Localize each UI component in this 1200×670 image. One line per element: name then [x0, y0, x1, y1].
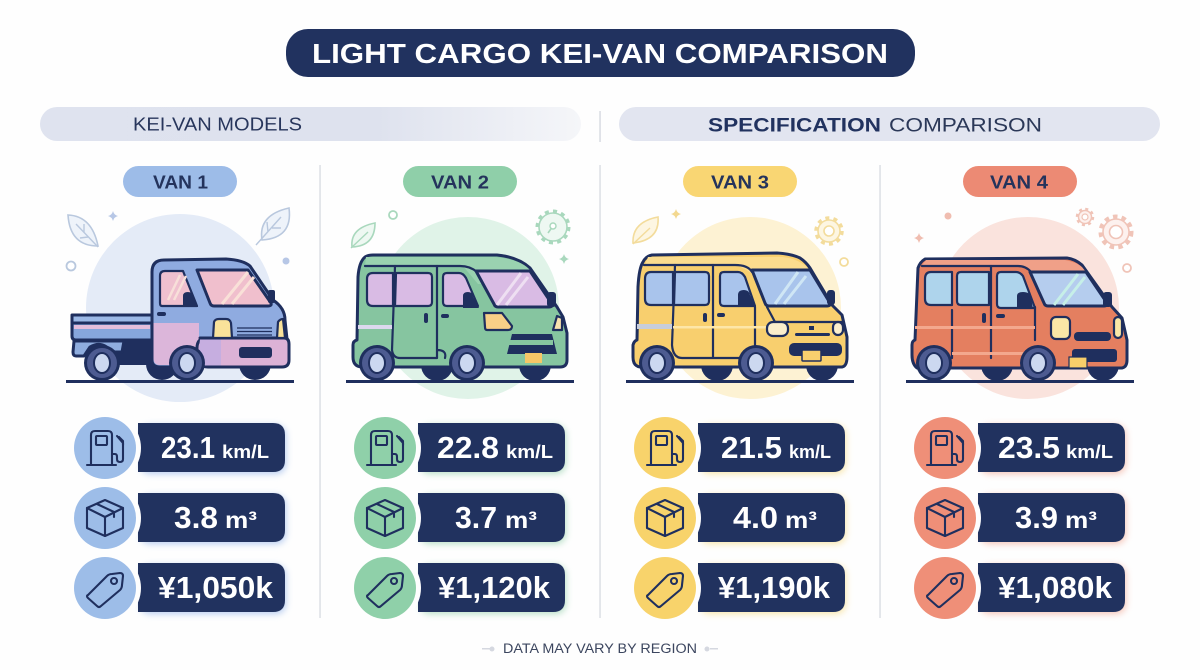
- fuel economy stat: km/L: [222, 442, 269, 462]
- van 4 label: [963, 166, 1077, 197]
- cargo volume stat: [629, 482, 846, 554]
- fuel economy stat: 23.1: [161, 430, 215, 465]
- cargo volume stat: m³: [505, 507, 537, 533]
- cargo volume stat: 3.8: [174, 500, 218, 535]
- section header: specification comparison: SPECIFICATION: [708, 116, 881, 136]
- van 1 label: VAN 1: [153, 172, 208, 192]
- fuel economy stat: 23.5: [998, 430, 1060, 465]
- section header: kei-van models: [40, 107, 581, 141]
- cargo volume stat: [909, 482, 1126, 554]
- price stat: ¥1,190k: [718, 570, 831, 605]
- panel: van 1: [66, 166, 294, 624]
- fuel economy stat: km/L: [1066, 442, 1113, 462]
- van 4 backdrop and decorations: [906, 209, 1134, 399]
- van 1 stats: [69, 412, 286, 624]
- panel: van 3: [626, 166, 854, 624]
- van 1 label: [123, 166, 237, 197]
- van 2 label: VAN 2: [431, 172, 489, 192]
- fuel economy stat: [629, 412, 846, 484]
- title: [286, 29, 915, 77]
- section header: specification comparison: COMPARISON: [889, 116, 1042, 136]
- fuel economy stat: 22.8: [437, 430, 499, 465]
- van 3 stats: [629, 412, 846, 624]
- price stat: [629, 552, 846, 624]
- fuel economy stat: km/L: [506, 442, 553, 462]
- cargo volume stat: m³: [785, 507, 817, 533]
- van 3 label: VAN 3: [711, 172, 769, 192]
- van 2 illustration: [353, 255, 567, 381]
- van 2 stats: [349, 412, 566, 624]
- footer note: DATA MAY VARY BY REGION: [503, 641, 697, 656]
- fuel economy stat: [349, 412, 566, 484]
- cargo volume stat: 4.0: [733, 500, 778, 535]
- cargo volume stat: m³: [225, 507, 257, 533]
- price stat: ¥1,080k: [998, 570, 1113, 605]
- section header: kei-van models: KEI-VAN MODELS: [133, 114, 302, 134]
- price stat: [69, 552, 286, 624]
- price stat: [909, 552, 1126, 624]
- cargo volume stat: [349, 482, 566, 554]
- price stat: ¥1,050k: [158, 570, 274, 605]
- van 1 backdrop and decorations: [66, 208, 294, 402]
- van 2 label: [403, 166, 517, 197]
- van 3 label: [683, 166, 797, 197]
- fuel economy stat: 21.5: [721, 430, 782, 465]
- title: LIGHT CARGO KEI-VAN COMPARISON: [312, 38, 888, 69]
- van 4 label: VAN 4: [990, 172, 1048, 192]
- cargo volume stat: 3.7: [455, 500, 497, 535]
- price stat: [349, 552, 566, 624]
- price stat: ¥1,120k: [438, 570, 551, 605]
- fuel economy stat: km/L: [789, 442, 831, 462]
- cargo volume stat: [69, 482, 286, 554]
- fuel economy stat: [909, 412, 1126, 484]
- van 3 illustration: [633, 253, 847, 381]
- section header: specification comparison: [619, 107, 1160, 141]
- cargo volume stat: m³: [1065, 507, 1097, 533]
- panel: van 4: [906, 166, 1134, 624]
- fuel economy stat: [69, 412, 286, 484]
- cargo volume stat: 3.9: [1015, 500, 1058, 535]
- van 3 backdrop and decorations: [626, 209, 854, 399]
- van 4 stats: [909, 412, 1126, 624]
- van 1 illustration: kei truck: [72, 259, 289, 381]
- van 4 illustration: [912, 258, 1127, 381]
- van 2 backdrop and decorations: [346, 211, 574, 399]
- panel: van 2: [346, 166, 574, 624]
